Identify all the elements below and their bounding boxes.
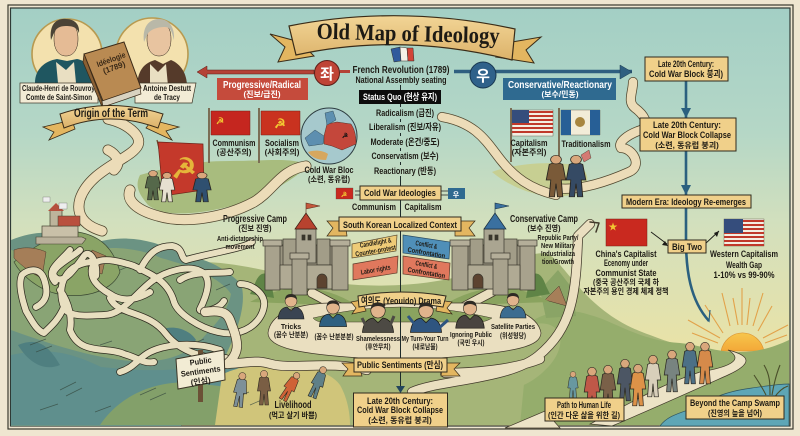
cold war ideologies row bbox=[336, 186, 465, 212]
box: Modern era: Modern Era: Ideology Re-emerges bbox=[626, 197, 746, 207]
ribbon: yeouido drama bbox=[351, 292, 452, 314]
arrow: left to progressive bbox=[197, 60, 350, 86]
castle: progressive bbox=[263, 203, 350, 295]
label: progressive / radical: Progressive/Radical bbox=[223, 80, 301, 91]
figure: ignoring public bbox=[450, 301, 492, 347]
spectrum labels bbox=[369, 108, 441, 176]
spectrum labels: Reactionary (반동) bbox=[374, 165, 436, 176]
flag: capitalism: Capitalism bbox=[510, 138, 548, 148]
path across conservative side bbox=[442, 82, 646, 195]
text: China's capitalist economy: (중국 공산주의 국체 하 bbox=[593, 277, 660, 287]
text: western capitalism: Western Capitalism bbox=[710, 249, 778, 259]
text: China's capitalist economy: Ecenomy under bbox=[604, 258, 648, 268]
flag: socialism: ☭ bbox=[274, 116, 286, 131]
pennant: conflict red bbox=[403, 256, 450, 280]
pennants: camp issues bbox=[352, 235, 450, 280]
portrait: Saint-Simon bbox=[32, 19, 102, 89]
label: conservative / reactionary: Conservative/Reactionary bbox=[508, 80, 612, 91]
box: beyond the camp swamp bbox=[686, 396, 784, 419]
flag: China: ★ bbox=[608, 222, 618, 232]
flag: communism: (공산주의) bbox=[217, 147, 252, 157]
cold war ideologies row: Communism bbox=[352, 202, 396, 212]
box: path to human life: Path to Human Life bbox=[557, 400, 611, 410]
text: conservative camp: New Military bbox=[541, 243, 575, 250]
text: China's capitalist economy: Communist State bbox=[596, 268, 656, 278]
flag chip: red: ☭ bbox=[341, 191, 347, 199]
ribbon: public sentiments bbox=[342, 358, 460, 376]
flag: socialism: (사회주의) bbox=[265, 147, 300, 157]
people: livelihood workers bbox=[232, 365, 330, 408]
French revolution heading: National Assembly seating bbox=[356, 75, 446, 85]
box: Collapse: Cold War Block Collapse bbox=[643, 130, 731, 140]
signpost: public sentiments bbox=[176, 350, 225, 402]
French revolution heading bbox=[352, 65, 450, 85]
text: progressive camp: movement bbox=[226, 244, 255, 251]
drama side roads bbox=[205, 224, 590, 392]
text: conservative camp: Conservative Camp bbox=[510, 214, 578, 225]
text: livelihood bbox=[269, 400, 317, 420]
text: western capitalism: 1-10% vs 99-90% bbox=[714, 270, 774, 280]
flag: socialism bbox=[258, 108, 300, 163]
box: beyond the camp swamp: (진영의 늪을 넘어) bbox=[708, 408, 762, 418]
flag: communism: ☭ bbox=[216, 116, 224, 126]
label: progressive / radical bbox=[217, 78, 308, 100]
icon: rising sun with rays bbox=[688, 288, 788, 351]
figure: satellite parties: Satellite Parties bbox=[491, 324, 535, 331]
hatch marks bbox=[30, 264, 264, 412]
figure: shamelessness: (후안무치) bbox=[366, 342, 390, 351]
figure: tricks bbox=[274, 294, 308, 339]
figure: shamelessness: Shamelessness bbox=[356, 336, 400, 343]
flag: traditionalism: Traditionalism bbox=[562, 139, 610, 149]
figure: ignoring public: (국민 우시) bbox=[458, 338, 484, 347]
pennant: conflict blue bbox=[403, 235, 450, 260]
status quo box bbox=[359, 90, 441, 104]
heading: Old Map of Ideology bbox=[316, 19, 500, 48]
box: Collapse bbox=[640, 118, 736, 151]
flag: socialism: Socialism bbox=[265, 138, 299, 148]
winding paths bbox=[20, 82, 646, 392]
portrait name: Saint-Simon: Comte de Saint-Simon bbox=[26, 93, 92, 102]
box: Cold War Block: Late 20th Century: bbox=[658, 59, 714, 69]
portrait name: Saint-Simon bbox=[20, 83, 98, 103]
timeline: right column bbox=[622, 57, 751, 321]
figure: satellite parties bbox=[491, 293, 535, 340]
road to the sunrise bbox=[505, 350, 746, 428]
red banner with followers: ☭ bbox=[171, 153, 197, 184]
ribbon: yeouido drama: 여의도 (Yeouido) Drama bbox=[361, 295, 442, 307]
label: conservative / reactionary: (보수/민동) bbox=[542, 90, 579, 99]
pennant: conflict red: Cenflict & bbox=[415, 260, 438, 271]
label: progressive / radical: (진보/급진) bbox=[244, 89, 281, 99]
text: conservative camp: Industrializa bbox=[541, 251, 575, 258]
ribbon: origin of the term bbox=[43, 106, 179, 140]
box: Collapse: Late 20th Century: bbox=[653, 120, 721, 130]
portrait name: de Tracy: de Tracy bbox=[154, 93, 180, 102]
central green field bbox=[11, 253, 789, 425]
pennant: candlelight: Candlelight & bbox=[359, 237, 392, 250]
big two node: Big Two bbox=[672, 242, 702, 252]
flag: capitalism: (자본주의) bbox=[512, 147, 547, 157]
right hill bbox=[520, 311, 789, 425]
figure: ignoring public: Ignoring Public bbox=[450, 332, 492, 339]
reeds bbox=[754, 365, 788, 398]
icon: Ideologie book bbox=[83, 42, 141, 107]
figure: my turn: My Turn-Your Turn bbox=[402, 336, 448, 343]
text: conservative camp bbox=[510, 214, 579, 266]
box: Modern era bbox=[622, 195, 751, 208]
flag: communism bbox=[208, 108, 256, 163]
signpost: public sentiments: (인심) bbox=[190, 375, 212, 387]
flag: capitalism bbox=[510, 108, 553, 162]
text: western capitalism bbox=[710, 249, 778, 280]
panel: origin portraits bbox=[20, 18, 196, 107]
text: livelihood: (먹고 살기 바쁨) bbox=[269, 410, 317, 420]
landscape bbox=[11, 160, 789, 426]
ribbon: south korean localized context: South Korean Localized Context bbox=[343, 220, 458, 231]
figure: shamelessness bbox=[356, 302, 400, 351]
figure: tricks: Tricks bbox=[281, 324, 301, 331]
ribbon: origin of the term: Origin of the Term bbox=[74, 108, 148, 120]
box: Cold War Block: Cold War Block 붕괴) bbox=[649, 68, 723, 79]
signpost: public sentiments: Sentiments bbox=[180, 364, 222, 379]
box: path to human life bbox=[545, 398, 624, 421]
portrait: Destutt de Tracy bbox=[116, 18, 188, 90]
text: China's capitalist economy: 자본주의 용인 경제 체제 정책 bbox=[584, 286, 668, 296]
text: progressive camp bbox=[217, 214, 287, 251]
flag: USA bbox=[724, 219, 764, 246]
green mound under castles bbox=[250, 288, 550, 306]
pennant: conflict blue: Conflict & bbox=[415, 240, 438, 251]
signpost: public sentiments: Public bbox=[189, 355, 213, 368]
figure: my turn: (내로남불) bbox=[412, 342, 438, 351]
hill under the left castle bbox=[14, 232, 120, 296]
pennant: candlelight: Counter-protest bbox=[355, 244, 397, 259]
arrow: right to conservative: 우 bbox=[476, 68, 490, 85]
people: path to human life bbox=[568, 342, 713, 409]
figure: tricks: (꼼수 난분분) bbox=[274, 330, 308, 339]
arrow: down to collapse box bbox=[396, 386, 405, 393]
left mountains bbox=[11, 233, 243, 426]
spectrum labels: Radicalism (급진) bbox=[376, 108, 434, 118]
figure: my turn bbox=[402, 302, 448, 351]
text: conservative camp: Republic Party/ bbox=[538, 235, 579, 242]
box: late 20th century bottom bbox=[354, 393, 448, 427]
status quo box: Status Quo (현상 유지) bbox=[363, 91, 437, 102]
box: late 20th century bottom: Late 20th Century: bbox=[367, 396, 433, 406]
castle: conservative bbox=[450, 203, 537, 295]
icon: French tricolor flag bbox=[391, 47, 414, 62]
text: progressive camp: Anti-dictatorship bbox=[217, 236, 263, 243]
globe: cold war bloc bbox=[301, 108, 357, 184]
figure: tricks 2 bbox=[314, 300, 354, 341]
yellow lower ground bbox=[215, 365, 350, 425]
text: progressive camp: Progressive Camp bbox=[223, 214, 287, 225]
icon: Ideologie book: Idéelogie bbox=[96, 50, 127, 69]
conservative hill bbox=[492, 163, 587, 196]
text: China's capitalist economy: China's Capitalist bbox=[596, 249, 657, 259]
drama ring road bbox=[268, 303, 541, 358]
politicians bbox=[274, 293, 535, 351]
arrow: right to conservative bbox=[454, 62, 632, 88]
spectrum axis bbox=[359, 85, 441, 392]
flag: China bbox=[606, 219, 647, 246]
big two node bbox=[651, 231, 719, 253]
box: beyond the camp swamp: Beyond the Camp Swamp bbox=[690, 398, 780, 408]
box: cold war ideologies: Cold War Ideologies bbox=[364, 188, 436, 198]
portrait name: de Tracy bbox=[135, 83, 196, 103]
path from origin of the term bbox=[79, 119, 306, 231]
globe: cold war bloc: (소련, 동유럽) bbox=[308, 174, 350, 184]
pennant: candlelight bbox=[352, 235, 397, 259]
text: progressive camp: (진보 진영) bbox=[238, 223, 272, 233]
flag: communism: Communism bbox=[212, 138, 256, 148]
pennant: labor rights: Labor rights bbox=[360, 264, 391, 277]
spectrum labels: Conservatism (보수) bbox=[372, 151, 438, 161]
figure: tricks 2: (꼼수 난분분분) bbox=[314, 332, 354, 341]
label: conservative / reactionary bbox=[503, 78, 616, 100]
pennant: conflict red: Confrontation bbox=[407, 267, 446, 280]
arrow: left to progressive: 좌 bbox=[320, 66, 334, 83]
ribbon: south korean localized context bbox=[327, 217, 475, 236]
portrait name: de Tracy: Antoine Destutt bbox=[143, 84, 191, 93]
box: Cold War Block bbox=[645, 57, 728, 81]
text: China's capitalist economy bbox=[584, 249, 668, 296]
ribbon: title banner bbox=[270, 16, 541, 63]
figure: satellite parties: (위성형당) bbox=[500, 331, 526, 340]
ribbon: public sentiments: Public Sentiments (만심) bbox=[357, 359, 443, 370]
people: comrades bbox=[145, 170, 211, 202]
box: path to human life: (인간 다운 삶을 위한 길) bbox=[548, 410, 620, 420]
text: livelihood: Livelihood bbox=[274, 400, 312, 411]
cold war ideologies row: Capitalism bbox=[404, 202, 442, 212]
box: Collapse: (소련, 동유럽 붕괴) bbox=[655, 140, 719, 150]
spectrum labels: Moderate (온건/중도) bbox=[370, 137, 440, 147]
box: late 20th century bottom: (소련, 동유럽 붕괴) bbox=[368, 415, 432, 425]
globe: cold war bloc: ☭ bbox=[342, 132, 348, 140]
spectrum labels: Liberalism (진보/자유) bbox=[369, 122, 441, 132]
left castle on the hill bbox=[36, 197, 86, 244]
French revolution heading: French Revolution (1789) bbox=[352, 65, 450, 76]
water bbox=[660, 384, 789, 426]
text: conservative camp: (보수 진영) bbox=[528, 223, 561, 233]
pennant: conflict blue: Confrontation bbox=[407, 247, 446, 260]
text: western capitalism: Wealth Gap bbox=[726, 260, 762, 270]
hill with communist flag bbox=[138, 160, 308, 213]
red banner with followers bbox=[145, 140, 211, 202]
icon: Ideologie book: (1789) bbox=[102, 59, 127, 76]
flag chip: blue: 우 bbox=[453, 191, 460, 199]
people: two conservative men bbox=[546, 150, 591, 197]
text: conservative camp: tion/Growth bbox=[542, 259, 574, 266]
flag: traditionalism bbox=[558, 108, 610, 163]
box: late 20th century bottom: Cold War Block Collapse bbox=[357, 405, 443, 415]
portrait name: Saint-Simon: Claude-Henri de Rouvroy, bbox=[22, 84, 96, 93]
globe: cold war bloc: Cold War Bloc bbox=[304, 165, 354, 175]
tangled knot path bbox=[20, 242, 264, 372]
